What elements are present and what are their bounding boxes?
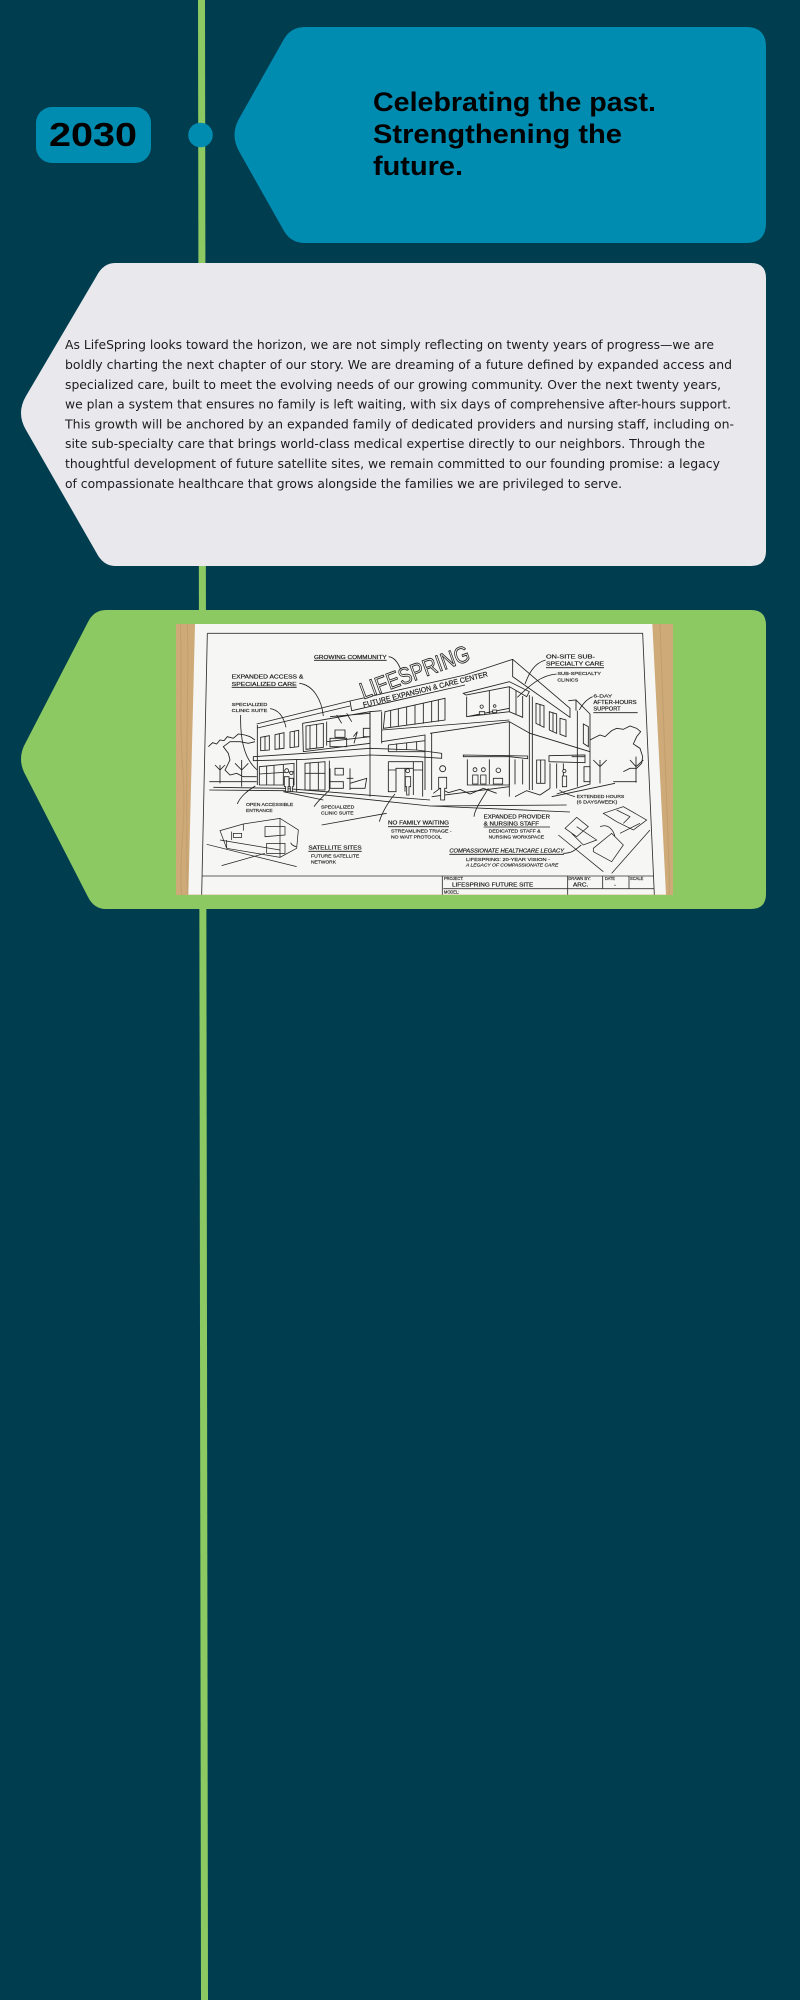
annotation labels: DRAWN BY: <box>568 876 591 882</box>
annotation labels: SUB-SPECIALTY <box>557 671 602 677</box>
annotation labels: EXTENDED HOURS <box>577 794 625 800</box>
annotation labels: EXPANDED ACCESS & <box>232 675 304 681</box>
paragraph: boldly charting the next chapter of our story. We are dreaming of a future defined by expanded access and <box>65 357 732 372</box>
year badge <box>36 107 151 163</box>
drawing frame <box>202 633 654 895</box>
annotation labels: NURSING WORKSPACE <box>489 835 545 841</box>
people <box>284 705 567 800</box>
callout arrows <box>237 657 593 853</box>
panel: body text <box>21 263 766 566</box>
annotation labels: NO WAIT PROTOCOL <box>391 834 442 840</box>
satellite sketches <box>207 807 650 873</box>
paragraph: thoughtful development of future satellite sites, we remain committed to our founding promise: a legacy <box>65 456 720 471</box>
annotation labels: STREAMLINED TRIAGE - <box>391 828 452 834</box>
year badge: 2030 <box>49 116 137 153</box>
building linework <box>208 659 643 825</box>
annotation labels: CLINIC SUITE <box>232 708 268 714</box>
annotation labels <box>232 654 644 895</box>
annotation labels: DATE <box>605 876 616 882</box>
annotation labels: ON-SITE SUB- <box>546 654 595 660</box>
paragraph: of compassionate healthcare that grows alongside the families we are privileged to serve. <box>65 476 622 491</box>
heading text: Strengthening the <box>373 119 622 149</box>
building sign: LIFESPRING <box>356 640 473 704</box>
annotation labels: CLINIC SUITE <box>321 810 354 816</box>
annotation labels: 6-DAY <box>593 694 613 700</box>
paragraph: As LifeSpring looks toward the horizon, we are not simply reflecting on twenty years of progress—we are <box>65 337 714 352</box>
annotation labels: LIFESPRING FUTURE SITE <box>452 883 534 889</box>
building sign: FUTURE EXPANSION & CARE CENTER <box>362 669 489 709</box>
paragraph: specialized care, built to meet the evolving needs of our growing community. Over the next twenty years, <box>65 377 721 392</box>
annotation labels: (6 DAYS/WEEK) <box>577 800 618 806</box>
annotation labels: EXPANDED PROVIDER <box>484 815 550 821</box>
timeline dot <box>188 123 213 147</box>
annotation labels: - <box>614 883 616 889</box>
paragraph: This growth will be anchored by an expanded family of dedicated providers and nursing staff, including on- <box>64 416 734 432</box>
annotation labels: GROWING COMMUNITY <box>314 655 387 661</box>
heading text <box>373 87 656 181</box>
panel: future site image <box>21 610 766 909</box>
annotation labels: SPECIALIZED <box>232 702 268 708</box>
annotation labels: NO FAMILY WAITING <box>388 821 449 827</box>
annotation labels: AFTER-HOURS <box>593 700 637 706</box>
annotation underlines <box>232 660 638 854</box>
annotation labels: ENTRANCE <box>246 808 273 814</box>
paragraph: site sub-specialty care that brings world-class medical expertise directly to our neighbors. Through the <box>65 436 705 451</box>
annotation labels: A LEGACY OF COMPASSIONATE CARE <box>465 863 559 869</box>
architectural sketch <box>176 624 673 895</box>
annotation labels: PROJECT: <box>444 876 463 882</box>
annotation labels: OPEN ACCESSIBLE <box>246 802 294 808</box>
annotation labels: NETWORK <box>311 860 337 866</box>
annotation labels: SATELLITE SITES <box>308 846 362 852</box>
annotation labels: LIFESPRING: 20-YEAR VISION - <box>466 857 550 863</box>
annotation labels: SPECIALIZED CARE <box>232 682 297 688</box>
annotation labels: CLINICS <box>557 677 579 683</box>
annotation labels: FUTURE SATELLITE <box>311 854 360 860</box>
annotation labels: DEDICATED STAFF & <box>489 829 541 835</box>
annotation labels: COMPASSIONATE HEALTHCARE LEGACY <box>449 849 565 855</box>
panel: heading <box>234 27 766 243</box>
annotation labels: SUPPORT <box>593 706 621 712</box>
annotation labels: & NURSING STAFF <box>484 821 540 827</box>
annotation labels: SCALE <box>630 876 644 882</box>
paper <box>188 624 666 895</box>
heading text: future. <box>373 151 463 181</box>
annotation labels: ARC. <box>573 883 589 889</box>
annotation labels: SPECIALIZED <box>321 805 355 811</box>
annotation labels: SPECIALTY CARE <box>546 662 604 668</box>
heading text: Celebrating the past. <box>373 87 656 117</box>
paragraph: we plan a system that ensures no family is left waiting, with six days of comprehensive after-hours support. <box>65 396 731 412</box>
annotation labels: MODEL: <box>444 889 459 895</box>
timeline line <box>198 0 208 2000</box>
paragraph <box>64 337 734 491</box>
